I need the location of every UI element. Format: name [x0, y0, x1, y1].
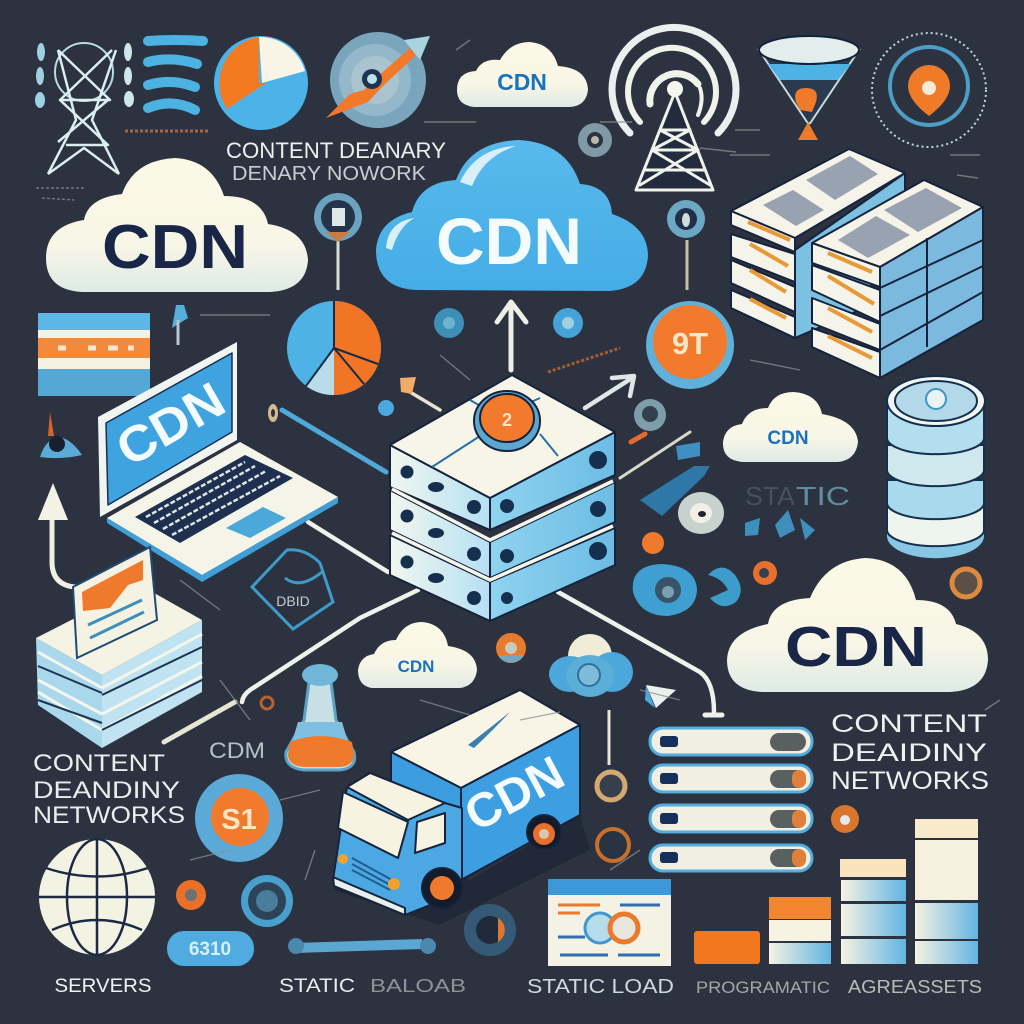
icon: slider connector [288, 938, 436, 954]
icon: target with rocket [326, 32, 430, 128]
cloud: small center bottom [358, 622, 477, 688]
icon: outline badge: DBID [276, 593, 310, 609]
badge: orange S1: S1 [221, 804, 257, 836]
pin: orange [400, 377, 440, 410]
icon: transmission tower [35, 43, 134, 174]
stack with tablet [36, 547, 202, 748]
bar 2 [650, 765, 812, 792]
tiny background marks [36, 40, 1000, 880]
connector lines [164, 410, 722, 742]
icon: radio antenna tower [612, 27, 736, 190]
cloud: center blue CDN [376, 140, 648, 291]
icon: pin connector [314, 193, 362, 290]
text: right network block: NETWORKS [831, 767, 989, 795]
cloud: left CDN: CDN [102, 213, 248, 282]
cloud: right bottom: CDN [785, 615, 927, 679]
cloud: right bottom [727, 558, 988, 692]
arrow: up left [38, 483, 75, 587]
label: assets: AGREASSETS [848, 977, 982, 997]
label: static load: STATIC LOAD [527, 976, 674, 998]
icon: flask [286, 664, 355, 770]
arrow: right from server [585, 376, 634, 408]
database cylinder [887, 376, 985, 558]
text: left network block [33, 750, 185, 829]
laptop [98, 342, 338, 582]
cloud: left CDN [46, 158, 308, 292]
server racks: right [731, 149, 983, 378]
text: left network block: CONTENT [33, 750, 165, 777]
icon: blue ring right [553, 308, 583, 338]
label: static aload: BALOAB [370, 976, 466, 996]
badge: blue pill: 6310 [189, 939, 231, 960]
icon: small blue drop [378, 400, 394, 416]
heading: content network [226, 138, 446, 185]
cloud: small center bottom: CDN [398, 657, 434, 676]
label: static faint: STA [745, 481, 796, 511]
chart: middle pie [287, 301, 381, 395]
icon: small blue ring [434, 308, 464, 338]
badge: orange 9T: 9T [672, 326, 708, 361]
central server stack [390, 375, 615, 621]
icon: small orange ring by flask [261, 697, 273, 709]
label: CDM: CDM [209, 738, 265, 763]
icon: play triangle [645, 685, 676, 708]
chart: top pie [214, 36, 308, 130]
icon: outline badge [252, 550, 333, 629]
icon: orange ring small [176, 880, 206, 910]
icon: right-of-server shapes [631, 399, 980, 616]
text: left network block: NETWORKS [33, 802, 185, 829]
delivery truck [333, 690, 590, 925]
label: assets [696, 977, 982, 997]
label: static faint [745, 481, 850, 511]
icon: pin orange ring [597, 710, 629, 861]
badge: orange S1 [195, 774, 283, 862]
delivery truck: CDN [456, 747, 573, 842]
heading: content network: CONTENT DEANARY [226, 138, 446, 163]
icon: funnel [759, 36, 859, 140]
cloud: small right: CDN [767, 428, 809, 449]
icon: flag bars [38, 313, 150, 396]
icon: orange ring right [831, 805, 859, 833]
text: right network block [831, 710, 989, 795]
icon: blue ring badge [241, 875, 293, 927]
icon: small gauge top [578, 123, 612, 157]
icon: small pin by blue line [268, 404, 278, 422]
arrow: up to center cloud [497, 302, 526, 370]
text: right network block: DEAIDINY [831, 739, 987, 767]
label: static aload [279, 976, 466, 997]
badge: blue pill [167, 931, 254, 966]
icon: small blue pin top-left [172, 305, 188, 345]
label: static aload: STATIC [279, 976, 355, 997]
badge: orange 9T [646, 301, 734, 389]
label: static faint: TIC [796, 481, 850, 511]
icon: signal bars [148, 40, 203, 110]
icon: orange ring under server [496, 633, 526, 663]
central server stack: 2 [502, 410, 512, 430]
icon: pin connector right [667, 200, 705, 290]
chart: stacked bars [694, 819, 978, 964]
bar 3 [650, 805, 812, 832]
bar 4 [650, 845, 812, 871]
text: right network block: CONTENT [831, 710, 987, 738]
icon: globe [39, 839, 155, 955]
label: servers: SERVERS [54, 975, 152, 997]
icon: web page panel [548, 879, 671, 966]
label: assets: PROGRAMATIC [696, 978, 830, 997]
icon: dark disc [464, 904, 516, 956]
server list bars [650, 728, 812, 871]
icon: location target [872, 33, 986, 147]
heading: content network: DENARY NOWORK [232, 163, 427, 185]
small cloud: top [457, 42, 588, 107]
icon: blue cloud small [549, 634, 633, 697]
small cloud: top: CDN [497, 69, 547, 95]
bar 1 [650, 728, 812, 755]
cloud: small right [723, 392, 858, 462]
laptop: CDN [107, 371, 234, 477]
cloud: center blue CDN: CDN [436, 204, 582, 278]
icon: small eye left [40, 412, 82, 458]
text: left network block: DEANDINY [33, 777, 180, 804]
